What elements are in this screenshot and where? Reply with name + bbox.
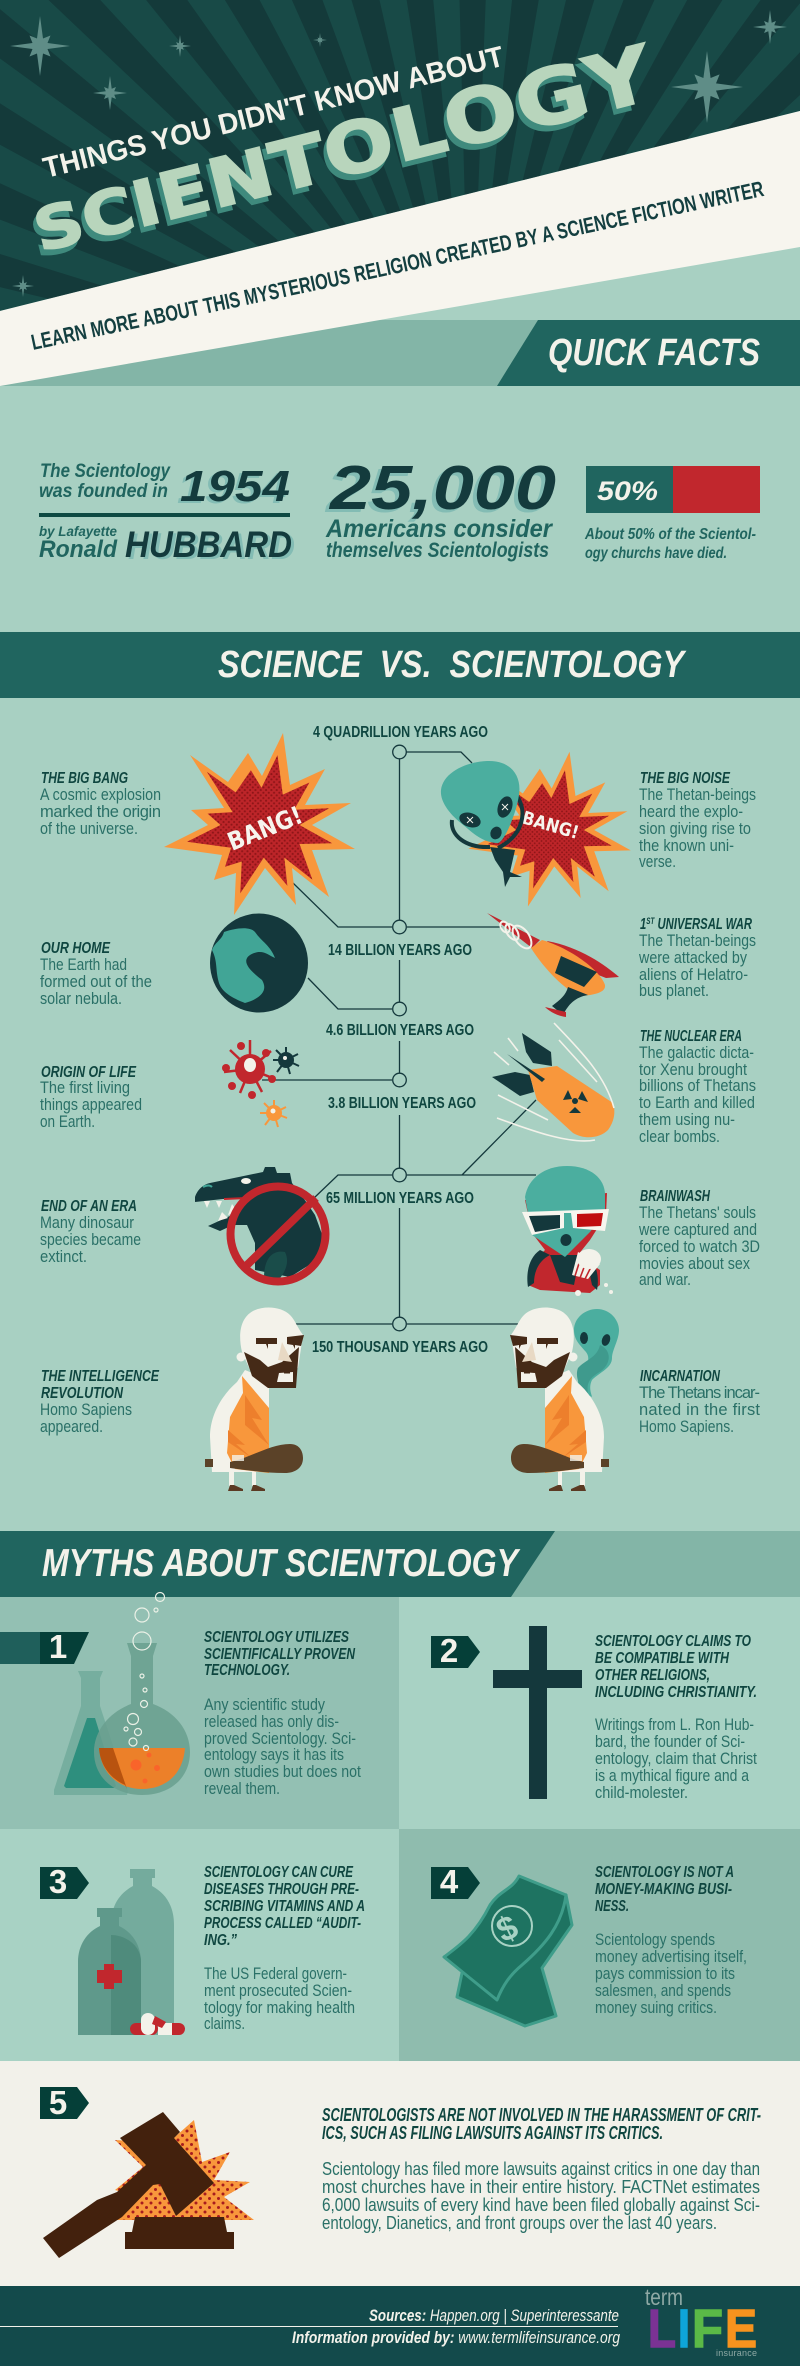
icon: alien with big noise explosion: BANG! bbox=[520, 808, 581, 844]
text: myth 4: SCIENTOLOGY IS NOT A bbox=[595, 1864, 734, 1881]
timeline connector lines bbox=[262, 752, 536, 1324]
timeline date labels: 150 THOUSAND YEARS AGO bbox=[312, 1339, 488, 1356]
text: the big noise: sion giving rise to bbox=[639, 820, 751, 838]
text: myth 3: PROCESS CALLED “AUDIT- bbox=[204, 1915, 361, 1932]
fact: 50% bar: ogy churchs have died. bbox=[585, 545, 727, 562]
fact: 25,000 Americans: Americans consider bbox=[325, 515, 553, 543]
text: origin of life: on Earth. bbox=[40, 1113, 95, 1131]
text: myth 1: TECHNOLOGY. bbox=[204, 1662, 290, 1679]
text: end of an era: Many dinosaur bbox=[40, 1214, 134, 1232]
text: myth 4 bbox=[595, 1864, 747, 2017]
fact: founded 1954: by Lafayette bbox=[39, 523, 117, 539]
footer: sources: Sources: Happen.org | Superinteressante bbox=[369, 2306, 619, 2325]
fact: founded 1954 bbox=[39, 461, 295, 567]
text: brainwash: were captured and bbox=[638, 1221, 757, 1239]
fact: founded 1954: 1954 bbox=[180, 462, 290, 511]
text: the intelligence revolution bbox=[40, 1368, 160, 1436]
icon: caveman with thetan ghost bbox=[510, 1308, 619, 1491]
fact: founded 1954: Ronald bbox=[39, 536, 118, 563]
text: the intelligence revolution: REVOLUTION bbox=[41, 1385, 123, 1402]
text: the nuclear era bbox=[639, 1028, 756, 1146]
text: myth 3: tology for making health bbox=[204, 1999, 355, 2017]
text: myth 4: money suing critics. bbox=[595, 1999, 717, 2017]
text: the nuclear era: clear bombs. bbox=[639, 1128, 720, 1146]
text: the big bang: marked the origin bbox=[40, 803, 161, 821]
text: myth 2: OTHER RELIGIONS, bbox=[595, 1667, 710, 1684]
icon: money bills: $ bbox=[491, 1908, 524, 1950]
text: myth 5 bbox=[322, 2105, 761, 2233]
text: myth 3: claims. bbox=[204, 2015, 245, 2033]
text: 1st universal war: bus planet. bbox=[639, 982, 709, 1000]
panel: myth 4 bbox=[399, 1829, 800, 2061]
text: myth 4: NESS. bbox=[595, 1898, 629, 1915]
timeline date labels: 3.8 BILLION YEARS AGO bbox=[328, 1095, 476, 1112]
text: myth 3: ING.” bbox=[204, 1932, 237, 1949]
text: myth 1: reveal them. bbox=[204, 1780, 280, 1798]
text: the nuclear era: them using nu- bbox=[639, 1111, 735, 1129]
text: myth 1: released has only dis- bbox=[204, 1713, 339, 1731]
icon: germs bbox=[222, 1040, 299, 1127]
text: the big noise bbox=[639, 770, 756, 871]
text: 1st universal war: ST bbox=[646, 916, 655, 926]
text: myth 1: SCIENTIFICALLY PROVEN bbox=[204, 1646, 355, 1663]
text: 1st universal war: were attacked by bbox=[638, 949, 748, 967]
text: the big noise: heard the explo- bbox=[639, 803, 743, 821]
badge: 1 bbox=[0, 1628, 89, 1665]
badge: 3 bbox=[40, 1863, 89, 1900]
text: the nuclear era: The galactic dicta- bbox=[639, 1044, 754, 1062]
text: myth 1: own studies but does not bbox=[204, 1763, 361, 1781]
logo: term life insurance: E bbox=[725, 2299, 757, 2359]
text: 1st universal war: UNIVERSAL WAR bbox=[654, 916, 752, 933]
header: dark sunburst bbox=[0, 0, 800, 311]
text: the intelligence revolution: appeared. bbox=[40, 1418, 103, 1436]
panel: myth 3 bbox=[0, 1829, 399, 2061]
text: the big noise: THE BIG NOISE bbox=[640, 770, 731, 787]
panel: myth 1 bbox=[0, 1592, 399, 1829]
fact: 50% bar: 50% bbox=[597, 476, 658, 506]
icon: falling nuclear bomb bbox=[492, 1023, 614, 1141]
fact: 25,000 Americans: 25,000 bbox=[325, 457, 552, 526]
text: incarnation: Homo Sapiens. bbox=[639, 1418, 734, 1436]
text: brainwash bbox=[638, 1188, 760, 1289]
text: our home: The Earth had bbox=[40, 956, 127, 974]
icon: dinosaur with prohibition sign bbox=[195, 1167, 326, 1282]
text: 1st universal war: aliens of Helatro- bbox=[639, 966, 748, 984]
heading: myths about scientology: MYTHS ABOUT SCIENTOLOGY bbox=[42, 1542, 520, 1585]
text: origin of life: The first living bbox=[40, 1079, 130, 1097]
footer bbox=[0, 2286, 800, 2366]
timeline date labels: 4.6 BILLION YEARS AGO bbox=[326, 1022, 474, 1039]
section band: myths bbox=[0, 1531, 800, 1597]
icon: gavel and burst bbox=[43, 2112, 254, 2258]
panel: myth 5 bbox=[0, 2061, 800, 2286]
text: myth 3 bbox=[204, 1864, 365, 2033]
text: brainwash: forced to watch 3D bbox=[639, 1238, 760, 1256]
badge: 5: 5 bbox=[49, 2084, 67, 2121]
text: myth 3: ment prosecuted Scien- bbox=[204, 1982, 352, 2000]
text: origin of life bbox=[40, 1064, 142, 1131]
text: end of an era: extinct. bbox=[40, 1248, 87, 1266]
text: incarnation: The Thetans incar- bbox=[639, 1384, 760, 1402]
text: brainwash: and war. bbox=[639, 1271, 691, 1289]
icon: laboratory flasks bbox=[54, 1592, 190, 1795]
timeline date labels: 4 QUADRILLION YEARS AGO bbox=[313, 724, 488, 741]
text: myth 1: proved Scientology. Sci- bbox=[204, 1730, 356, 1748]
text: the nuclear era: tor Xenu brought bbox=[639, 1061, 747, 1079]
text: myth 3: SCRIBING VITAMINS AND A bbox=[204, 1898, 365, 1915]
text: myth 2: BE COMPATIBLE WITH bbox=[595, 1650, 729, 1667]
badge: 4 bbox=[431, 1863, 480, 1900]
title word: Scientology: SCIENTOLOGY bbox=[23, 28, 663, 270]
timeline nodes bbox=[393, 745, 406, 1331]
text: myth 5: entology, Dianetics, and front groups over the last 40 years. bbox=[322, 2213, 717, 2233]
heading: science vs scientology: SCIENCE VS. SCIENTOLOGY bbox=[218, 644, 687, 686]
text: the big bang bbox=[40, 770, 161, 838]
timeline date labels bbox=[312, 724, 488, 1356]
section band: science vs scientology bbox=[0, 632, 800, 698]
text: the nuclear era: THE NUCLEAR ERA bbox=[640, 1028, 742, 1045]
text: origin of life: things appeared bbox=[40, 1096, 142, 1114]
icon: ray gun bbox=[487, 913, 619, 1017]
text: myth 5: ICS, SUCH AS FILING LAWSUITS AGAINST ITS CRITICS. bbox=[322, 2123, 663, 2143]
icon: alien with 3D glasses and popcorn bbox=[522, 1166, 613, 1296]
icon: stars bbox=[10, 10, 787, 297]
icon: big bang explosion: BANG! bbox=[223, 800, 307, 857]
timeline date labels: 65 MILLION YEARS AGO bbox=[326, 1190, 474, 1207]
text: myth 1: Any scientific study bbox=[204, 1696, 326, 1714]
icon: cross bbox=[493, 1626, 582, 1799]
text: brainwash: movies about sex bbox=[639, 1255, 751, 1273]
text: myth 1: SCIENTOLOGY UTILIZES bbox=[204, 1629, 349, 1646]
text: 1st universal war: The Thetan-beings bbox=[639, 932, 756, 950]
logo: term life insurance: F bbox=[692, 2299, 723, 2359]
text: our home: OUR HOME bbox=[41, 940, 111, 957]
text: myth 3: DISEASES THROUGH PRE- bbox=[204, 1881, 359, 1898]
fact: 25,000 Americans: themselves Scientologists bbox=[326, 539, 549, 562]
fact: 50% bar bbox=[584, 466, 760, 562]
text: our home: formed out of the bbox=[40, 973, 152, 991]
timeline date labels: 14 BILLION YEARS AGO bbox=[328, 942, 472, 959]
text: end of an era: END OF AN ERA bbox=[41, 1198, 137, 1215]
text: myth 1 bbox=[204, 1629, 361, 1798]
text: the intelligence revolution: Homo Sapiens bbox=[40, 1401, 132, 1419]
text: myth 3: The US Federal govern- bbox=[204, 1965, 347, 1983]
icon: earth bbox=[210, 914, 308, 1012]
icon: big bang explosion bbox=[164, 733, 355, 915]
text: the intelligence revolution: THE INTELLIGENCE bbox=[41, 1368, 160, 1385]
fact: founded 1954: The Scientology bbox=[40, 461, 171, 482]
text: incarnation: INCARNATION bbox=[640, 1368, 720, 1385]
text: 1st universal war: 1 bbox=[640, 916, 649, 933]
text: the big bang: A cosmic explosion bbox=[40, 786, 161, 804]
footer: information provided by: Information provided by: www.termlifeinsurance.org bbox=[292, 2328, 620, 2347]
badge: 3: 3 bbox=[49, 1863, 67, 1900]
text: myth 4: MONEY-MAKING BUSI- bbox=[595, 1881, 732, 1898]
logo: term life insurance: insurance bbox=[716, 2348, 757, 2358]
logo: term life insurance: L bbox=[648, 2299, 676, 2359]
text: 1st universal war bbox=[638, 916, 756, 1000]
heading: quick facts: QUICK FACTS bbox=[548, 332, 760, 374]
title line: things you didn't know about: THINGS YOU DIDN'T KNOW ABOUT bbox=[40, 41, 507, 185]
logo: term life insurance: I bbox=[678, 2299, 690, 2359]
text: brainwash: The Thetans' souls bbox=[639, 1204, 756, 1222]
text: the nuclear era: billions of Thetans bbox=[639, 1077, 756, 1095]
text: myth 4: money advertising itself, bbox=[595, 1948, 747, 1966]
badge: 5 bbox=[40, 2084, 89, 2121]
panel: myth 2 bbox=[399, 1597, 800, 1829]
fact: 25,000 Americans bbox=[325, 454, 556, 562]
text: myth 2: bard, the founder of Sci- bbox=[595, 1733, 745, 1751]
text: myth 2 bbox=[595, 1633, 757, 1802]
badge: 4: 4 bbox=[440, 1863, 459, 1900]
logo: term life insurance: term bbox=[645, 2284, 683, 2310]
fact: founded 1954: 1954 bbox=[177, 464, 287, 513]
text: the big bang: THE BIG BANG bbox=[41, 770, 128, 787]
fact: 25,000 Americans: 25,000 bbox=[329, 454, 556, 523]
text: myth 2: is a mythical figure and a bbox=[595, 1767, 750, 1785]
badge: 2: 2 bbox=[440, 1632, 458, 1669]
icon: medicine bottles and pills bbox=[78, 1869, 185, 2035]
text: the big bang: of the universe. bbox=[40, 820, 138, 838]
text: the big noise: verse. bbox=[639, 853, 676, 871]
text: the big noise: The Thetan-beings bbox=[639, 786, 756, 804]
text: the nuclear era: to Earth and killed bbox=[639, 1094, 755, 1112]
text: myth 2: INCLUDING CHRISTIANITY. bbox=[595, 1684, 757, 1701]
text: brainwash: BRAINWASH bbox=[640, 1188, 710, 1205]
text: myth 2: SCIENTOLOGY CLAIMS TO bbox=[595, 1633, 751, 1650]
text: myth 2: child-molester. bbox=[595, 1784, 688, 1802]
text: myth 3: SCIENTOLOGY CAN CURE bbox=[204, 1864, 354, 1881]
icon: caveman bbox=[205, 1308, 304, 1491]
quick facts stripe bbox=[0, 320, 800, 386]
icon: alien with big noise explosion bbox=[441, 752, 631, 906]
fact: 50% bar: About 50% of the Scientol- bbox=[584, 526, 756, 543]
fact: founded 1954: HUBBARD bbox=[128, 526, 295, 567]
fact: founded 1954: was founded in bbox=[39, 481, 168, 502]
text: myth 4: Scientology spends bbox=[595, 1931, 715, 1949]
text: myth 2: Writings from L. Ron Hub- bbox=[595, 1716, 754, 1734]
text: origin of life: ORIGIN OF LIFE bbox=[41, 1064, 137, 1081]
icon: money bills bbox=[444, 1876, 572, 2026]
text: incarnation bbox=[639, 1368, 760, 1436]
logo: term life insurance bbox=[645, 2284, 757, 2359]
text: myth 4: pays commission to its bbox=[595, 1965, 735, 1983]
fact: founded 1954: HUBBARD bbox=[125, 524, 292, 565]
text: end of an era: species became bbox=[40, 1231, 141, 1249]
badge: 2 bbox=[431, 1632, 480, 1669]
text: myth 2: entology, claim that Christ bbox=[595, 1750, 757, 1768]
text: our home bbox=[40, 940, 152, 1008]
text: our home: solar nebula. bbox=[40, 990, 122, 1008]
title word: Scientology: SCIENTOLOGY bbox=[20, 34, 660, 276]
text: myth 1: entology says it has its bbox=[204, 1746, 344, 1764]
text: the big noise: the known uni- bbox=[639, 837, 734, 855]
text: myth 4: salesmen, and spends bbox=[595, 1982, 731, 2000]
badge: 1: 1 bbox=[49, 1628, 67, 1665]
white banner bbox=[0, 111, 800, 386]
text: end of an era bbox=[40, 1198, 141, 1266]
text: incarnation: nated in the first bbox=[639, 1401, 760, 1419]
